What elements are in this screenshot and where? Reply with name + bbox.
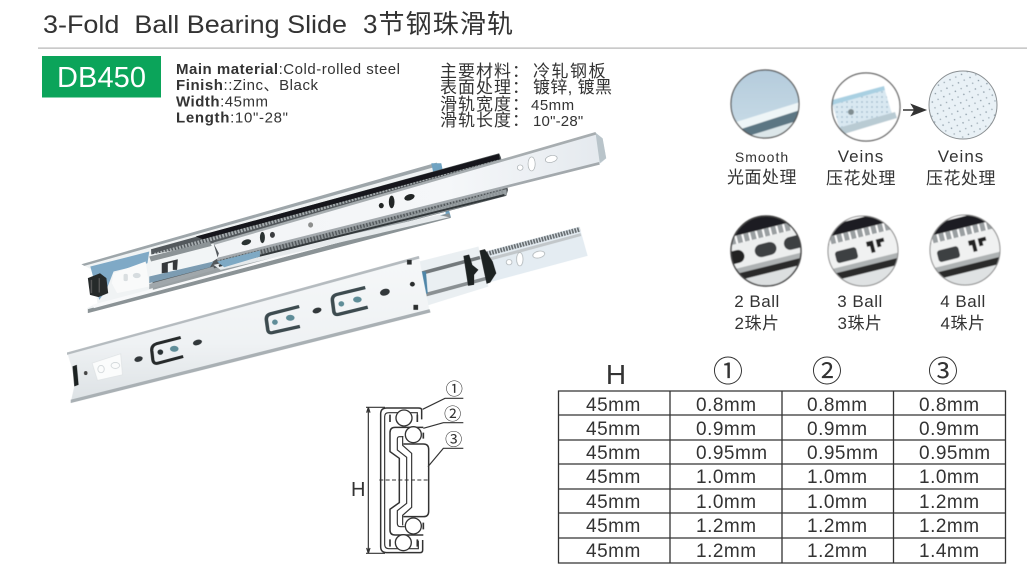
row 2: [586, 419, 980, 440]
row 6: 1.2mm: [696, 516, 757, 537]
row 7: 1.2mm: [807, 541, 868, 562]
row 6: [586, 516, 980, 537]
row 7: 1.4mm: [919, 541, 980, 562]
english specifications: Length:10"-28": [176, 110, 288, 126]
row 2: 0.9mm: [919, 419, 980, 440]
middle channel: [390, 427, 423, 535]
chinese specifications: 镀锌, 镀黑: [533, 78, 612, 97]
label: 4 ball: [940, 292, 986, 333]
row 5: [586, 492, 980, 513]
slide rail: closed view: [81, 132, 606, 313]
title: [43, 9, 513, 39]
row 6: 45mm: [586, 516, 641, 537]
dimension H: H: [351, 479, 365, 501]
label: 3 ball: 3珠片: [838, 314, 882, 333]
row 5: 1.0mm: [696, 492, 757, 513]
label: veins: [826, 147, 896, 188]
callouts: ③: [445, 430, 462, 450]
label: smooth: Smooth: [735, 149, 789, 165]
row 4: 1.0mm: [696, 467, 757, 488]
label: smooth: [727, 149, 797, 187]
row 6: 1.2mm: [807, 516, 868, 537]
thickness table: [558, 391, 1006, 563]
label: 3 ball: 3 Ball: [837, 292, 883, 311]
row 5: 45mm: [586, 492, 641, 513]
label: smooth: 光面处理: [727, 168, 797, 187]
table headers: ②: [812, 356, 842, 389]
label: 4 ball: 4珠片: [941, 314, 985, 333]
label: veins texture: [926, 147, 996, 188]
english specifications: Main material:Cold-rolled steel: [176, 61, 400, 78]
row 3: 0.95mm: [807, 443, 879, 464]
model badge: [42, 56, 161, 98]
row 6: 1.2mm: [919, 516, 980, 537]
icon: veins finish rail: [830, 70, 902, 144]
row 4: [586, 467, 980, 488]
callouts: ①: [446, 379, 463, 399]
row 4: 1.0mm: [807, 467, 868, 488]
label: 3 ball: [837, 292, 883, 333]
icon: stopper slot: [162, 259, 178, 273]
outer channel: [381, 408, 423, 553]
label: veins: 压花处理: [826, 169, 896, 188]
dimension H: [351, 407, 385, 553]
chinese specifications: 滑轨宽度：: [440, 95, 530, 114]
row 1: 0.8mm: [696, 395, 757, 416]
row 7: 1.2mm: [696, 541, 757, 562]
row 5: 1.2mm: [919, 492, 980, 513]
bearing balls: [395, 410, 421, 551]
row 7: 45mm: [586, 541, 641, 562]
row 3: 0.95mm: [696, 443, 768, 464]
model badge: DB450: [57, 62, 146, 94]
arrow: [903, 105, 925, 115]
row 4: 45mm: [586, 467, 641, 488]
chinese specifications: 冷轧钢板: [533, 62, 607, 81]
label: 2 ball: 2珠片: [735, 314, 779, 333]
chinese specifications: 45mm: [531, 97, 575, 114]
row 7: [586, 541, 980, 562]
label: 4 ball: 4 Ball: [940, 292, 986, 311]
chinese specifications: 10"-28": [533, 113, 583, 130]
chinese specifications: 表面处理：: [440, 78, 530, 97]
row 2: 0.9mm: [807, 419, 868, 440]
label: veins texture: Veins: [938, 147, 984, 166]
row 1: 45mm: [586, 395, 641, 416]
inner channel: [403, 444, 429, 517]
icon: veins texture: [929, 71, 997, 139]
icon: 2 ball: [729, 214, 803, 288]
row 3: 45mm: [586, 443, 641, 464]
label: 2 ball: 2 Ball: [734, 292, 780, 311]
chinese specifications: 主要材料：: [440, 62, 530, 81]
icon: 3 ball: [826, 214, 900, 288]
table headers: H: [606, 359, 626, 390]
row 4: 1.0mm: [919, 467, 980, 488]
table headers: [606, 356, 958, 390]
row 3: [586, 443, 991, 464]
icon: black clips: [463, 255, 478, 286]
title: 3-Fold Ball Bearing Slide: [43, 10, 347, 39]
icon: bracket slots: [152, 337, 183, 363]
slide rail: extended view: [67, 227, 588, 403]
icon: 4 ball: [928, 214, 1002, 286]
row 1: [586, 395, 980, 416]
icon: smooth finish: [730, 68, 802, 140]
table headers: ③: [928, 356, 958, 389]
english specifications: [176, 61, 400, 126]
row 3: 0.95mm: [919, 443, 991, 464]
chinese specifications: [440, 62, 612, 130]
row 5: 1.0mm: [807, 492, 868, 513]
title: 3节钢珠滑轨: [363, 9, 513, 39]
row 1: 0.8mm: [807, 395, 868, 416]
row 1: 0.8mm: [919, 395, 980, 416]
english specifications: Width:45mm: [176, 94, 268, 110]
center line: [379, 478, 430, 481]
callouts: [423, 379, 463, 467]
icon: black clip: [88, 273, 108, 297]
callouts: ②: [444, 404, 461, 424]
row 2: 45mm: [586, 419, 641, 440]
chinese specifications: 滑轨长度：: [440, 111, 530, 130]
english specifications: Finish::Zinc、Black: [176, 77, 318, 94]
label: veins: Veins: [838, 147, 884, 166]
row 2: 0.9mm: [696, 419, 757, 440]
label: 2 ball: [734, 292, 780, 333]
table headers: ①: [713, 356, 743, 389]
cross-section diagram: [351, 379, 463, 553]
label: veins texture: 压花处理: [926, 169, 996, 188]
